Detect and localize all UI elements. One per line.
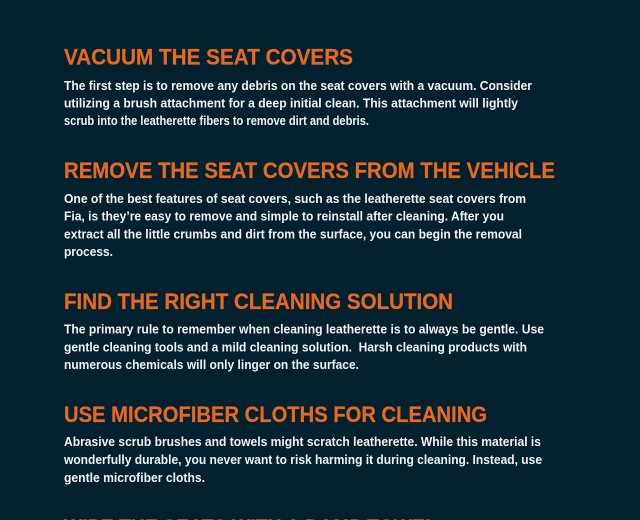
text block: vacuum instructions [64, 79, 532, 128]
text block: removal instructions: One of the best features of seat covers, such as the leatherette seat covers from [64, 192, 526, 206]
section: vacuum the seat covers [64, 44, 532, 128]
section: remove the seat covers [64, 158, 555, 259]
text block: microfiber advice: Abrasive scrub brushes and towels might scratch leatherette. While this material is [64, 435, 541, 449]
text block: cleaning solution advice: numerous chemicals will only linger on the surface. [64, 358, 359, 372]
text block: removal instructions: Fia, is they’re easy to remove and simple to reinstall after cleaning. After you [64, 210, 504, 224]
text block: cleaning solution advice: gentle cleaning tools and a mild cleaning solution. Harsh cleaning products with [64, 340, 527, 354]
heading: use microfiber cloths for cleaning: USE MICROFIBER CLOTHS FOR CLEANING [64, 402, 487, 427]
text block: vacuum instructions: The first step is to remove any debris on the seat covers with a vacuum. Consider [64, 79, 532, 93]
text block: microfiber advice [63, 435, 542, 485]
section: use microfiber cloths [63, 402, 542, 485]
text block: removal instructions: process. [64, 245, 113, 259]
heading: remove the seat covers from the vehicle: REMOVE THE SEAT COVERS FROM THE VEHICLE [64, 158, 555, 183]
text block: cleaning solution advice [64, 323, 544, 372]
text block: removal instructions [64, 192, 526, 259]
text block: vacuum instructions: scrub into the leatherette fibers to remove dirt and debris. [64, 114, 369, 128]
heading: find the right cleaning solution: FIND THE RIGHT CLEANING SOLUTION [64, 289, 453, 314]
text block: vacuum instructions: utilizing a brush attachment for a deep initial clean. This attachment will lightly [64, 96, 518, 110]
text block: microfiber advice: wonderfully durable, you never want to risk harming it during cleaning. Instead, use [63, 453, 542, 467]
text block: removal instructions: extract all the little crumbs and dirt from the surface, you can begin the removal [64, 227, 522, 241]
text block: microfiber advice: gentle microfiber cloths. [64, 471, 205, 485]
section: find the right cleaning solution [64, 289, 544, 372]
heading: vacuum the seat covers: VACUUM THE SEAT COVERS [64, 44, 353, 70]
text block: cleaning solution advice: The primary rule to remember when cleaning leatherette is to always be gentle. Use [64, 323, 544, 337]
